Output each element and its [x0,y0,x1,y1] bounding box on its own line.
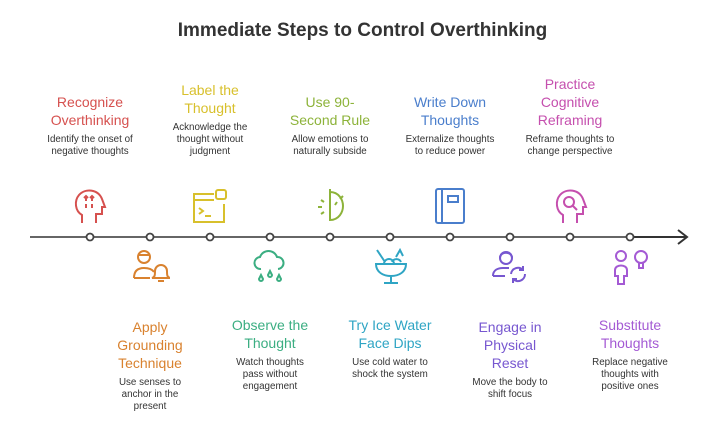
step: Recognize Overthinking: negative thoughts [51,146,129,157]
step: Recognize Overthinking: Recognize [57,94,123,110]
icon: cloud rain [254,250,284,282]
step: Recognize Overthinking [47,94,133,157]
icon: terminal [193,189,227,223]
step: Write Down Thoughts [406,94,494,157]
step: Practice Cognitive Reframing: Reframe thoughts to [526,134,614,145]
step: Engage in Physical Reset [472,319,548,400]
step: Practice Cognitive Reframing: change perspective [528,146,612,157]
step: Engage in Physical Reset: shift focus [488,389,532,400]
step: Engage in Physical Reset: Reset [492,355,528,371]
step: Use 90-Second Rule [290,94,370,157]
step: Apply Grounding Technique: anchor in the [122,389,178,400]
step: Label the Thought: Label the [181,82,239,98]
step: Substitute Thoughts: Substitute [599,317,661,333]
step: Practice Cognitive Reframing: Reframing [538,112,602,128]
step: Substitute Thoughts: Replace negative [592,357,668,368]
title: Immediate Steps to Control Overthinking [178,20,547,41]
step: Use 90-Second Rule: Second Rule [290,112,370,128]
step: Try Ice Water Face Dips [348,317,432,380]
step: Recognize Overthinking: Identify the onset of [47,134,133,145]
step: Use 90-Second Rule: naturally subside [293,146,367,157]
step: Write Down Thoughts: Externalize thoughts [406,134,494,145]
step: Practice Cognitive Reframing: Practice [545,76,595,92]
step: Engage in Physical Reset: Move the body to [472,377,548,388]
icon: head [74,190,106,223]
step: Write Down Thoughts: to reduce power [415,146,485,157]
step: Use 90-Second Rule: Allow emotions to [292,134,368,145]
step: Write Down Thoughts: Thoughts [421,112,479,128]
icon: head search [556,190,588,223]
step: Apply Grounding Technique: Use senses to [119,377,181,388]
step: Observe the Thought [232,317,308,392]
icon: person bell [133,250,170,282]
step: Recognize Overthinking: Overthinking [51,112,129,128]
step: Apply Grounding Technique: Technique [118,355,182,371]
icon: timer [318,189,344,221]
step: Label the Thought: thought without [177,134,243,145]
step: Apply Grounding Technique: Apply [132,319,168,335]
step: Write Down Thoughts: Write Down [414,94,486,110]
step: Observe the Thought: Observe the [232,317,308,333]
step: Try Ice Water Face Dips: shock the system [352,369,428,380]
step: Engage in Physical Reset: Engage in [478,319,542,335]
step: Substitute Thoughts: Thoughts [601,335,659,351]
icon: person bulb [614,250,648,285]
step: Observe the Thought: engagement [243,381,297,392]
step: Apply Grounding Technique: Grounding [117,337,183,353]
step: Label the Thought [172,82,247,157]
step: Try Ice Water Face Dips: Try Ice Water [349,317,431,333]
step: Try Ice Water Face Dips: Use cold water to [352,357,428,368]
step: Apply Grounding Technique: present [134,401,166,412]
step: Substitute Thoughts: thoughts with [601,369,659,380]
step: Apply Grounding Technique [117,319,183,412]
step: Observe the Thought: Watch thoughts [236,357,304,368]
step: Practice Cognitive Reframing [526,76,614,157]
step: Observe the Thought: Thought [244,335,296,351]
step: Try Ice Water Face Dips: Face Dips [358,335,422,351]
step: Label the Thought: Thought [184,100,236,116]
step: Label the Thought: Acknowledge the [173,122,247,133]
step: Label the Thought: judgment [190,146,230,157]
icon: person refresh [492,251,526,283]
step: Practice Cognitive Reframing: Cognitive [541,94,599,110]
step: Substitute Thoughts [592,317,668,392]
step: Use 90-Second Rule: Use 90- [305,94,355,110]
icon: ice cream cup [375,248,407,284]
step: Engage in Physical Reset: Physical [484,337,536,353]
step: Substitute Thoughts: positive ones [601,381,659,392]
icon: notebook [435,188,465,224]
step: Observe the Thought: pass without [243,369,297,380]
